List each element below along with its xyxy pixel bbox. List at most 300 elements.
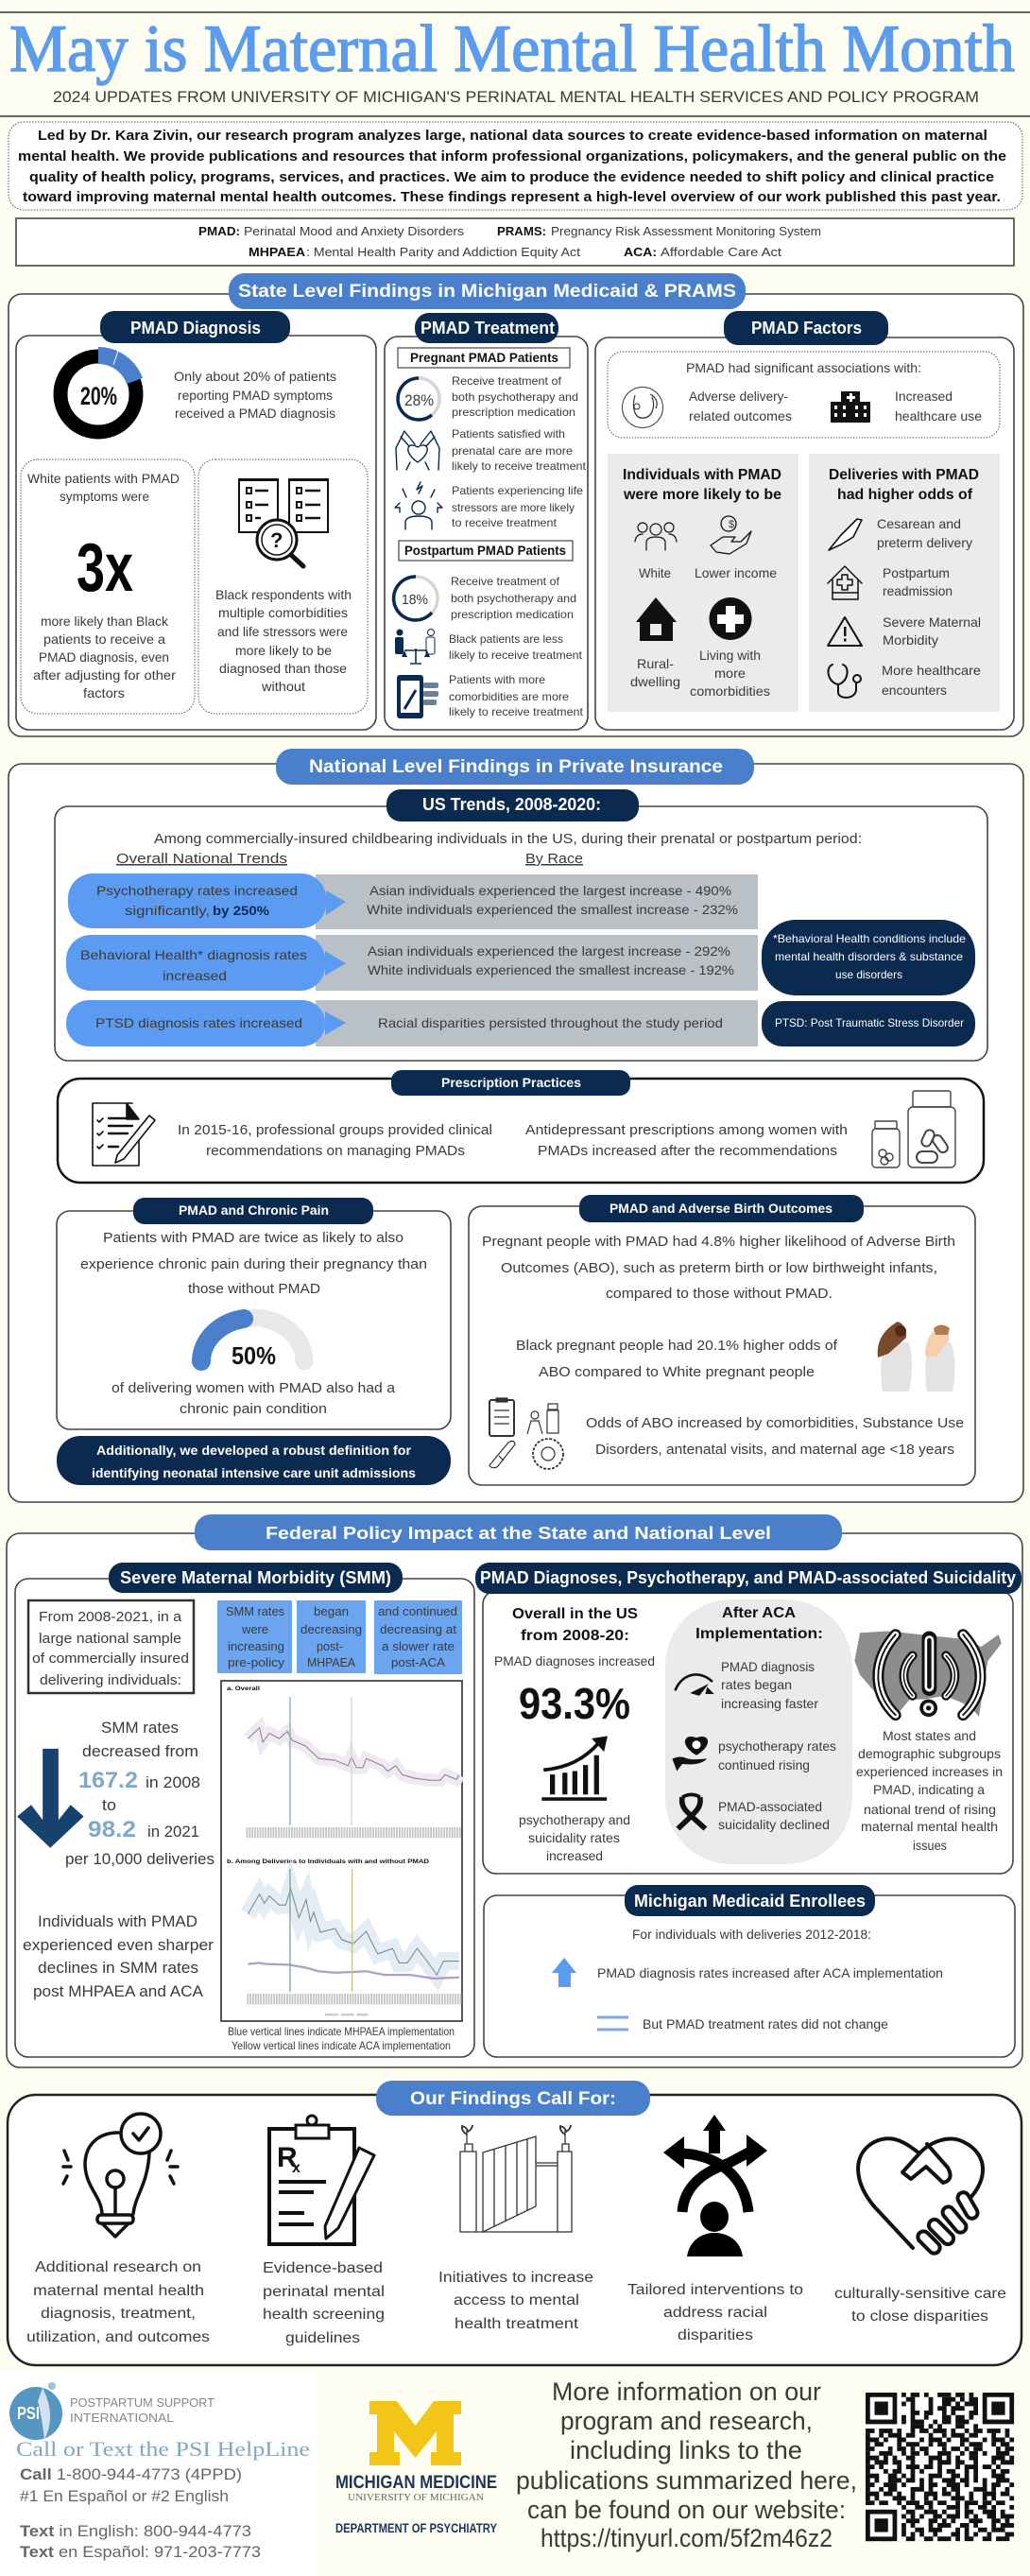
icon: US map with alert xyxy=(854,1631,1002,1717)
column headings xyxy=(116,851,583,867)
stat ring: 18%: 18% xyxy=(402,592,428,608)
text: national trend xyxy=(856,1728,1003,1853)
text box: sample description: delivering individuals: xyxy=(40,1672,181,1688)
panel: Michigan Medicaid enrollees xyxy=(484,1885,1015,2057)
recommendation: screening guidelines xyxy=(263,2116,385,2346)
timeline labels xyxy=(217,1600,462,1674)
icon: prescription clipboard xyxy=(269,2116,374,2244)
note: PTSD definition: PTSD: Post Traumatic Stress Disorder xyxy=(775,1016,964,1029)
column: overall in the US: from 2008-20: xyxy=(521,1628,629,1644)
panel: Michigan Medicaid enrollees: For individuals with deliveries 2012-2018: xyxy=(632,1927,871,1942)
recommendation: additional research: Additional research on xyxy=(35,2259,201,2275)
text: comorbidities: Patients with more xyxy=(449,673,545,686)
icon: speedometer xyxy=(675,1674,714,1696)
donut chart: 20% xyxy=(60,348,136,432)
recommendation: screening guidelines: Evidence-based xyxy=(263,2260,383,2276)
text: 20% diagnosed: Only about 20% of patients xyxy=(174,369,336,384)
stat ring: 18% xyxy=(394,577,438,620)
callout: significant associations: Increased xyxy=(895,389,953,404)
panel: PMAD and adverse birth outcomes: Black pregnant people had 20.1% higher odds of xyxy=(516,1338,838,1354)
row: psychotherapy: Psychotherapy rates increased xyxy=(96,883,298,898)
heading: PMAD diagnosis: PMAD Diagnosis xyxy=(130,319,261,337)
label: post-ACA: decreasing at xyxy=(380,1622,456,1636)
heading: PMAD diagnoses: PMAD Diagnoses, Psychotherapy, and PMAD-associated Suicidality xyxy=(480,1568,1016,1587)
intro text block: quality of health policy, programs, services, and practices. We aim to produce the evidence needed to shift policy and clinical practice xyxy=(29,169,994,185)
box: deliveries with PMAD: had higher odds of xyxy=(837,487,973,503)
panel: state level findings xyxy=(9,273,1023,736)
box: deliveries with PMAD: preterm delivery xyxy=(877,535,972,550)
label: pre-policy: increasing xyxy=(228,1639,284,1653)
text box: sample description xyxy=(28,1600,194,1693)
box: deliveries with PMAD: Postpartum xyxy=(883,565,950,580)
text: 20% diagnosed: received a PMAD diagnosis xyxy=(175,406,335,421)
label: post-ACA: a slower rate xyxy=(382,1639,455,1653)
panel: PMAD and chronic pain: of delivering women with PMAD also had a xyxy=(112,1380,396,1396)
label: pre-policy: SMM rates xyxy=(226,1604,284,1618)
abbreviations legend: : Mental Health Parity and Addiction Equity Act xyxy=(306,245,580,259)
recommendation: culturally-sensitive care: to close disparities xyxy=(851,2308,988,2325)
logo: PSI xyxy=(9,2382,62,2440)
row: psychotherapy: by 250% xyxy=(213,903,270,918)
footer: more information: program and research, xyxy=(560,2407,813,2435)
footer: more information: https://tinyurl.com/5f2m46z2 xyxy=(541,2524,833,2552)
heading: national level findings: National Level Findings in Private Insurance xyxy=(309,757,723,777)
callout: black respondents: without xyxy=(261,679,305,694)
heading: US trends: US Trends, 2008-2020: xyxy=(422,795,601,814)
recommendation: tailored interventions: disparities xyxy=(678,2327,753,2343)
panel: prescription practices: PMADs increased after the recommendations xyxy=(538,1143,837,1159)
callout: 3x white patients: factors xyxy=(83,685,125,700)
text: satisfied with care: likely to receive treatment xyxy=(452,459,587,473)
icon: stressed person xyxy=(395,482,442,529)
box: deliveries with PMAD: More healthcare xyxy=(882,663,981,678)
box: deliveries with PMAD: readmission xyxy=(883,583,953,598)
icon: heart in hand xyxy=(672,1737,708,1771)
label: pre-policy xyxy=(217,1600,292,1673)
box: individuals with PMAD: Individuals with PMAD xyxy=(623,467,781,483)
panel: PMAD and adverse birth outcomes: Disorders, antenatal visits, and maternal age <18 years xyxy=(595,1442,954,1458)
gauge: 50% xyxy=(201,1318,304,1370)
footer: PSI helpline: #1 En Español or #2 English xyxy=(20,2487,229,2505)
text: satisfied with care xyxy=(452,427,587,473)
stat ring: 28% xyxy=(398,378,439,420)
title: May is Maternal Mental Health Month xyxy=(9,12,1015,86)
icon: prescription clipboard: x xyxy=(292,2160,300,2176)
heading: chronic pain: PMAD and Chronic Pain xyxy=(179,1202,329,1218)
label: post-MHPAEA: began xyxy=(314,1604,349,1618)
panel: Michigan Medicaid enrollees: But PMAD treatment rates did not change xyxy=(643,2016,888,2031)
text: national trend: issues xyxy=(913,1838,947,1853)
chart caption: Blue vertical lines indicate MHPAEA implementation xyxy=(228,2025,455,2038)
footer: PSI helpline: Text en Español: 971-203-7773 xyxy=(20,2543,261,2561)
panel: PMAD and adverse birth outcomes xyxy=(469,1195,975,1485)
subheading: pregnant patients xyxy=(398,348,570,368)
chart caption xyxy=(228,2025,455,2052)
recommendation: tailored interventions: address racial xyxy=(663,2305,767,2321)
icon: checklists with magnifier: ? xyxy=(270,528,283,552)
label: post-ACA: post-ACA xyxy=(391,1655,445,1669)
panel: PMAD and chronic pain: chronic pain condition xyxy=(180,1401,327,1417)
column: after ACA implementation: rates began xyxy=(721,1677,792,1692)
footer: Michigan Medicine logo: MICHIGAN MEDICINE xyxy=(335,2473,497,2493)
panel: PMAD treatment xyxy=(385,313,588,730)
panel: Michigan Medicaid enrollees: PMAD diagnosis rates increased after ACA implementation xyxy=(597,1965,943,1980)
text: satisfied with care: Patients satisfied with xyxy=(452,427,565,441)
recommendation: access initiatives: Initiatives to increase xyxy=(438,2270,593,2286)
panel: our findings call for xyxy=(8,2081,1021,2365)
text: sharper declines: experienced even sharper xyxy=(23,1936,214,1954)
panel: PMAD and chronic pain: experience chronic pain during their pregnancy than xyxy=(80,1256,427,1272)
box: individuals with PMAD: $ xyxy=(729,519,734,530)
icon: hand with coin xyxy=(711,516,751,554)
text: national trend: maternal mental health xyxy=(861,1819,998,1834)
label: pre-policy: were xyxy=(241,1622,268,1636)
note: behavioral health definition xyxy=(762,920,975,995)
recommendation: screening guidelines: guidelines xyxy=(285,2330,360,2346)
callout: black respondents: more likely to be xyxy=(235,643,332,658)
callout: 3x white patients: after adjusting for other xyxy=(33,667,176,683)
footer: more information: including links to the xyxy=(570,2436,802,2464)
abbreviations legend: Affordable Care Act xyxy=(661,245,781,259)
icon: phone and pills xyxy=(397,675,438,718)
note: behavioral health definition: mental health disorders & substance xyxy=(775,950,963,963)
recommendation: culturally-sensitive care xyxy=(834,2138,1006,2325)
text: comorbidities: comorbidities are more xyxy=(449,690,569,703)
footer: PSI helpline: Call or Text the PSI HelpLine xyxy=(16,2437,310,2461)
icon: heart in hands xyxy=(396,431,439,470)
heading: SMM: Severe Maternal Morbidity (SMM) xyxy=(120,1568,391,1587)
icon: house xyxy=(636,597,677,641)
heading: PMAD diagnosis xyxy=(100,311,290,343)
column: overall in the US: PMAD diagnoses increased xyxy=(494,1653,655,1668)
callout: significant associations: related outcomes xyxy=(689,408,792,424)
donut chart: 20%: 20% xyxy=(80,382,117,410)
recommendation: access initiatives: access to mental xyxy=(454,2292,579,2308)
panel: PMAD and adverse birth outcomes: ABO compared to White pregnant people xyxy=(539,1364,815,1380)
heading: state level findings xyxy=(229,273,746,309)
intro text block xyxy=(9,122,1022,210)
recommendation: access initiatives xyxy=(438,2125,593,2332)
stat ring: 28%: 28% xyxy=(404,391,434,409)
text: comorbidities xyxy=(449,673,584,718)
text: receive treatment 18%: Receive treatment of xyxy=(451,575,560,588)
icon: equal sign xyxy=(597,2017,628,2030)
callout: significant associations: healthcare use xyxy=(895,408,982,424)
box: individuals with PMAD: Living with xyxy=(699,648,761,663)
box: deliveries with PMAD: encounters xyxy=(882,683,947,698)
box: deliveries with PMAD: Deliveries with PMAD xyxy=(829,467,979,483)
callout: 3x white patients: PMAD diagnosis, even xyxy=(39,649,169,665)
icon: open gate xyxy=(460,2125,572,2232)
footer: Michigan Medicine logo: UNIVERSITY OF MICHIGAN xyxy=(348,2492,484,2503)
column: after ACA implementation: suicidality declined xyxy=(718,1817,830,1832)
text: life stressors: stressors are more likely xyxy=(452,501,575,514)
recommendation: screening guidelines: health screening xyxy=(263,2307,385,2323)
icon: checklists with magnifier xyxy=(239,478,328,566)
box: deliveries with PMAD: Severe Maternal xyxy=(883,614,981,630)
footer: Michigan Medicine logo xyxy=(335,2401,498,2535)
panel: US trends xyxy=(55,789,987,1061)
heading: US trends xyxy=(386,789,639,821)
icon: crossroads arrows with person xyxy=(663,2115,767,2256)
label: post-MHPAEA xyxy=(297,1600,366,1673)
icon: pill bottles xyxy=(872,1091,955,1167)
row: PTSD: PTSD diagnosis rates increased xyxy=(95,1015,302,1030)
text: receive treatment 28% xyxy=(452,374,578,419)
text: comorbidities: likely to receive treatment xyxy=(449,705,584,718)
box: individuals with PMAD: Rural- xyxy=(637,656,674,671)
box: individuals with PMAD: White xyxy=(639,565,671,580)
icon: pregnant figures xyxy=(878,1322,955,1392)
row: behavioral health: White individuals experienced the smallest increase - 192% xyxy=(368,962,734,977)
row: psychotherapy: Asian individuals experienced the largest increase - 490% xyxy=(369,883,731,898)
stat: SMM decrease: in 2021 xyxy=(147,1823,199,1841)
footer: PSI helpline: Call 1-800-944-4773 (4PPD) xyxy=(20,2465,242,2483)
icon: handshake heart xyxy=(858,2138,983,2256)
text: black patients: Black patients are less xyxy=(449,632,563,646)
icon: warning xyxy=(828,617,862,646)
icon: up arrow xyxy=(552,1958,576,1987)
text: life stressors xyxy=(452,484,583,529)
row: behavioral health xyxy=(66,935,758,991)
panel: national level findings xyxy=(9,749,1023,1502)
text: national trend: Most states and xyxy=(883,1728,976,1743)
label: post-ACA: and continued xyxy=(378,1604,457,1618)
column: after ACA implementation: continued rising xyxy=(718,1757,810,1772)
box: deliveries with PMAD xyxy=(809,454,1000,712)
callout: significant associations xyxy=(608,352,1000,438)
column: overall in the US: 93.3% xyxy=(519,1679,630,1728)
icon: down arrow xyxy=(17,1749,84,1848)
box: deliveries with PMAD: Cesarean and xyxy=(877,516,961,531)
panel: severe maternal morbidity xyxy=(15,1563,474,2057)
callout: black respondents: and life stressors were xyxy=(217,624,348,639)
label: post-MHPAEA: decreasing xyxy=(300,1622,362,1636)
text: black patients: likely to receive treatment xyxy=(449,648,583,662)
column: after ACA implementation: Implementation: xyxy=(695,1626,823,1642)
box: individuals with PMAD: dwelling xyxy=(630,674,680,689)
footer: more information xyxy=(516,2377,857,2552)
text: receive treatment 28%: Receive treatment of xyxy=(452,374,562,388)
row: behavioral health: Behavioral Health* diagnosis rates xyxy=(80,947,307,962)
recommendation: tailored interventions: Tailored interventions to xyxy=(627,2282,803,2298)
stat: SMM decrease: to xyxy=(102,1796,116,1814)
panel: prescription practices: In 2015-16, professional groups provided clinical xyxy=(178,1122,492,1138)
text: receive treatment 18%: prescription medication xyxy=(451,608,574,621)
box: individuals with PMAD: Lower income xyxy=(695,565,777,580)
footer: PSI helpline xyxy=(0,2371,318,2576)
stat: SMM decrease xyxy=(65,1719,215,1868)
icon: home with medical cross xyxy=(828,566,862,599)
icon: hospital xyxy=(831,391,870,423)
panel: PMAD and chronic pain: those without PMAD xyxy=(188,1281,320,1297)
text: sharper declines: declines in SMM rates xyxy=(38,1959,198,1977)
column: after ACA implementation: increasing faster xyxy=(721,1696,818,1711)
callout: NICU definition: Additionally, we developed a robust definition for xyxy=(96,1443,412,1458)
heading: federal policy impact: Federal Policy Impact at the State and National Level xyxy=(266,1524,771,1543)
callout: black respondents xyxy=(198,459,368,714)
recommendation: tailored interventions xyxy=(627,2115,803,2343)
heading: chronic pain xyxy=(133,1198,373,1224)
callout: 3x white patients: patients to receive a xyxy=(43,631,165,647)
text box: sample description: large national sample xyxy=(39,1631,181,1647)
chart: SMM rates over time: b. Among Deliveries to Individuals with and without PMAD xyxy=(227,1859,430,1865)
panel: PMAD and chronic pain xyxy=(57,1198,451,1429)
text box: sample description: of commercially insured xyxy=(32,1651,189,1667)
text: life stressors: to receive treatment xyxy=(452,516,558,529)
icon: awareness ribbon xyxy=(678,1794,705,1828)
row: behavioral health: Asian individuals experienced the largest increase - 292% xyxy=(368,943,730,959)
label: post-MHPAEA: MHPAEA xyxy=(307,1655,355,1669)
intro text block: Led by Dr. Kara Zivin, our research program analyzes large, national data sources to create evidence-based information on maternal xyxy=(38,128,987,144)
icon: scales and two people xyxy=(395,630,435,664)
subheading: postpartum patients: Postpartum PMAD Patients xyxy=(404,543,566,558)
recommendation: screening guidelines: perinatal mental xyxy=(263,2284,385,2300)
text: sharper declines: Individuals with PMAD xyxy=(38,1912,197,1930)
icon: rising bar chart xyxy=(541,1736,608,1799)
text box: sample description: From 2008-2021, in a xyxy=(39,1609,182,1625)
chart caption: Yellow vertical lines indicate ACA implementation xyxy=(232,2039,451,2052)
footer: PSI helpline: POSTPARTUM SUPPORT xyxy=(70,2395,215,2410)
icon: stethoscope xyxy=(828,665,861,698)
text: receive treatment 18%: both psychotherapy and xyxy=(451,592,576,605)
abbreviations legend xyxy=(16,218,1014,266)
text: receive treatment 28%: prescription medication xyxy=(452,406,575,419)
abbreviations legend: PMAD: xyxy=(198,224,240,238)
box: deliveries with PMAD: Morbidity xyxy=(883,632,938,648)
recommendation: culturally-sensitive care: culturally-sensitive care xyxy=(834,2286,1006,2302)
stat: SMM decrease: decreased from xyxy=(82,1742,198,1760)
label: post-MHPAEA: post- xyxy=(317,1639,343,1653)
column headings: By Race xyxy=(525,851,583,867)
callout: 3x white patients xyxy=(21,459,195,714)
recommendation: additional research: utilization, and outcomes xyxy=(26,2329,210,2345)
heading: PMAD factors: PMAD Factors xyxy=(751,319,862,337)
panel: PMAD diagnosis xyxy=(16,311,376,730)
callout: 3x white patients: 3x xyxy=(77,530,133,606)
icon: prescription clipboard: R xyxy=(277,2142,298,2173)
text: national trend: national trend of rising xyxy=(864,1802,996,1817)
panel: PMAD factors xyxy=(595,311,1014,730)
panel: PMAD and adverse birth outcomes: Outcomes (ABO), such as preterm birth or low birthweight infants, xyxy=(501,1260,937,1276)
heading: SMM xyxy=(109,1563,403,1593)
column: after ACA implementation: PMAD-associated xyxy=(718,1799,822,1814)
label: post-ACA xyxy=(374,1600,462,1674)
row: psychotherapy xyxy=(68,873,758,929)
heading: Michigan Medicaid xyxy=(625,1885,875,1916)
panel: prescription practices xyxy=(58,1070,984,1183)
callout: NICU definition: identifying neonatal intensive care unit admissions xyxy=(92,1465,416,1480)
panel: PMAD and adverse birth outcomes: Odds of ABO increased by comorbidities, Substance Use xyxy=(586,1415,964,1431)
chart: SMM rates over time xyxy=(221,1681,462,2021)
heading: adverse birth outcomes: PMAD and Adverse Birth Outcomes xyxy=(609,1201,833,1216)
icon: checklist and pen xyxy=(93,1103,155,1166)
text: black patients xyxy=(449,632,583,662)
text: sharper declines: post MHPAEA and ACA xyxy=(33,1982,204,2000)
label: pre-policy: pre-policy xyxy=(228,1655,285,1669)
row: PTSD xyxy=(66,1000,758,1046)
column: after ACA implementation: PMAD diagnosis xyxy=(721,1659,815,1674)
icon: light bulb with check xyxy=(63,2114,178,2237)
text: national trend: PMAD, indicating a xyxy=(873,1782,985,1797)
note: PTSD definition xyxy=(762,1001,975,1046)
column headings: Overall National Trends xyxy=(116,851,287,867)
text: 20% diagnosed xyxy=(174,369,336,421)
box: individuals with PMAD: comorbidities xyxy=(690,683,770,699)
box: individuals with PMAD: were more likely to be xyxy=(623,487,781,503)
box: individuals with PMAD: more xyxy=(714,666,746,681)
recommendation: additional research: diagnosis, treatment, xyxy=(41,2306,196,2322)
heading: PMAD diagnoses xyxy=(475,1563,1021,1594)
intro text block: toward improving maternal mental health outcomes. These findings represent a high-level overview of our work published this past year. xyxy=(23,189,1001,205)
panel: PMAD diagnoses, psychotherapy, suicidality xyxy=(475,1563,1021,1874)
heading: Michigan Medicaid: Michigan Medicaid Enrollees xyxy=(634,1892,866,1910)
callout: 3x white patients: White patients with PMAD xyxy=(27,471,180,486)
heading: PMAD treatment xyxy=(415,313,558,343)
recommendation: additional research xyxy=(26,2114,210,2345)
stat: SMM decrease: SMM rates xyxy=(101,1719,179,1737)
row: PTSD: Racial disparities persisted throughout the study period xyxy=(378,1015,723,1030)
heading: our findings call for xyxy=(376,2081,650,2116)
chart: SMM rates over time: a. Overall xyxy=(227,1686,260,1692)
column: overall in the US: suicidality rates xyxy=(528,1830,620,1845)
heading: PMAD treatment: PMAD Treatment xyxy=(421,319,555,337)
footer: Michigan Medicine logo: DEPARTMENT OF PSYCHIATRY xyxy=(335,2520,498,2535)
column: overall in the US: Overall in the US xyxy=(512,1606,638,1622)
callout: black respondents: multiple comorbidities xyxy=(218,605,348,620)
text: population description: Among commercially-insured childbearing individuals in the US, during their prenatal or postpartum period: xyxy=(154,831,862,847)
column: overall in the US: increased xyxy=(546,1848,603,1863)
callout: significant associations: PMAD had significant associations with: xyxy=(686,360,921,375)
QR code xyxy=(866,2393,1014,2541)
abbreviations legend: PRAMS: xyxy=(497,224,546,238)
icon: risk factors xyxy=(489,1398,563,1469)
heading: state level findings: State Level Findings in Michigan Medicaid & PRAMS xyxy=(238,282,736,302)
icon: scalpel xyxy=(829,519,862,550)
panel: PMAD and adverse birth outcomes: Pregnant people with PMAD had 4.8% higher likelihood of Adverse Birth xyxy=(482,1234,955,1250)
box: individuals with PMAD xyxy=(608,454,798,712)
text: sharper declines xyxy=(23,1912,214,2000)
subheading: pregnant patients: Pregnant PMAD Patients xyxy=(410,350,558,365)
footer: more information: can be found on our website: xyxy=(527,2496,846,2524)
text: national trend: demographic subgroups xyxy=(858,1746,1001,1761)
heading: PMAD factors xyxy=(724,311,888,345)
row: psychotherapy: significantly, xyxy=(125,903,210,918)
stat: SMM decrease: 98.2 xyxy=(88,1817,136,1842)
abbreviations legend: Pregnancy Risk Assessment Monitoring System xyxy=(551,224,821,238)
callout: NICU definition xyxy=(57,1436,451,1485)
row: behavioral health: increased xyxy=(163,968,227,983)
gauge: 50%: 50% xyxy=(232,1341,276,1370)
column: after ACA implementation: After ACA xyxy=(722,1605,796,1621)
footer: more information: publications summarized here, xyxy=(516,2466,857,2495)
abbreviations legend: ACA: xyxy=(624,245,657,259)
column: overall in the US xyxy=(494,1606,655,1863)
panel: PMAD and chronic pain: Patients with PMAD are twice as likely to also xyxy=(103,1230,403,1246)
column: overall in the US: psychotherapy and xyxy=(519,1812,630,1827)
panel: federal policy impact xyxy=(7,1514,1022,2067)
subtitle: 2024 UPDATES FROM UNIVERSITY OF MICHIGAN'S PERINATAL MENTAL HEALTH SERVICES AND POLICY PROGRAM xyxy=(53,88,979,106)
stat: SMM decrease: 167.2 xyxy=(78,1768,138,1793)
abbreviations legend: MHPAEA xyxy=(249,245,306,259)
text: satisfied with care: prenatal care are more xyxy=(452,444,573,458)
footer: PSI helpline: INTERNATIONAL xyxy=(70,2411,174,2425)
text: life stressors: Patients experiencing life xyxy=(452,484,583,497)
text: national trend: experienced increases in xyxy=(856,1764,1003,1779)
note: behavioral health definition: use disorders xyxy=(835,968,902,981)
text: receive treatment 28%: both psychotherapy and xyxy=(452,390,578,404)
callout: black respondents: Black respondents with xyxy=(215,587,352,602)
